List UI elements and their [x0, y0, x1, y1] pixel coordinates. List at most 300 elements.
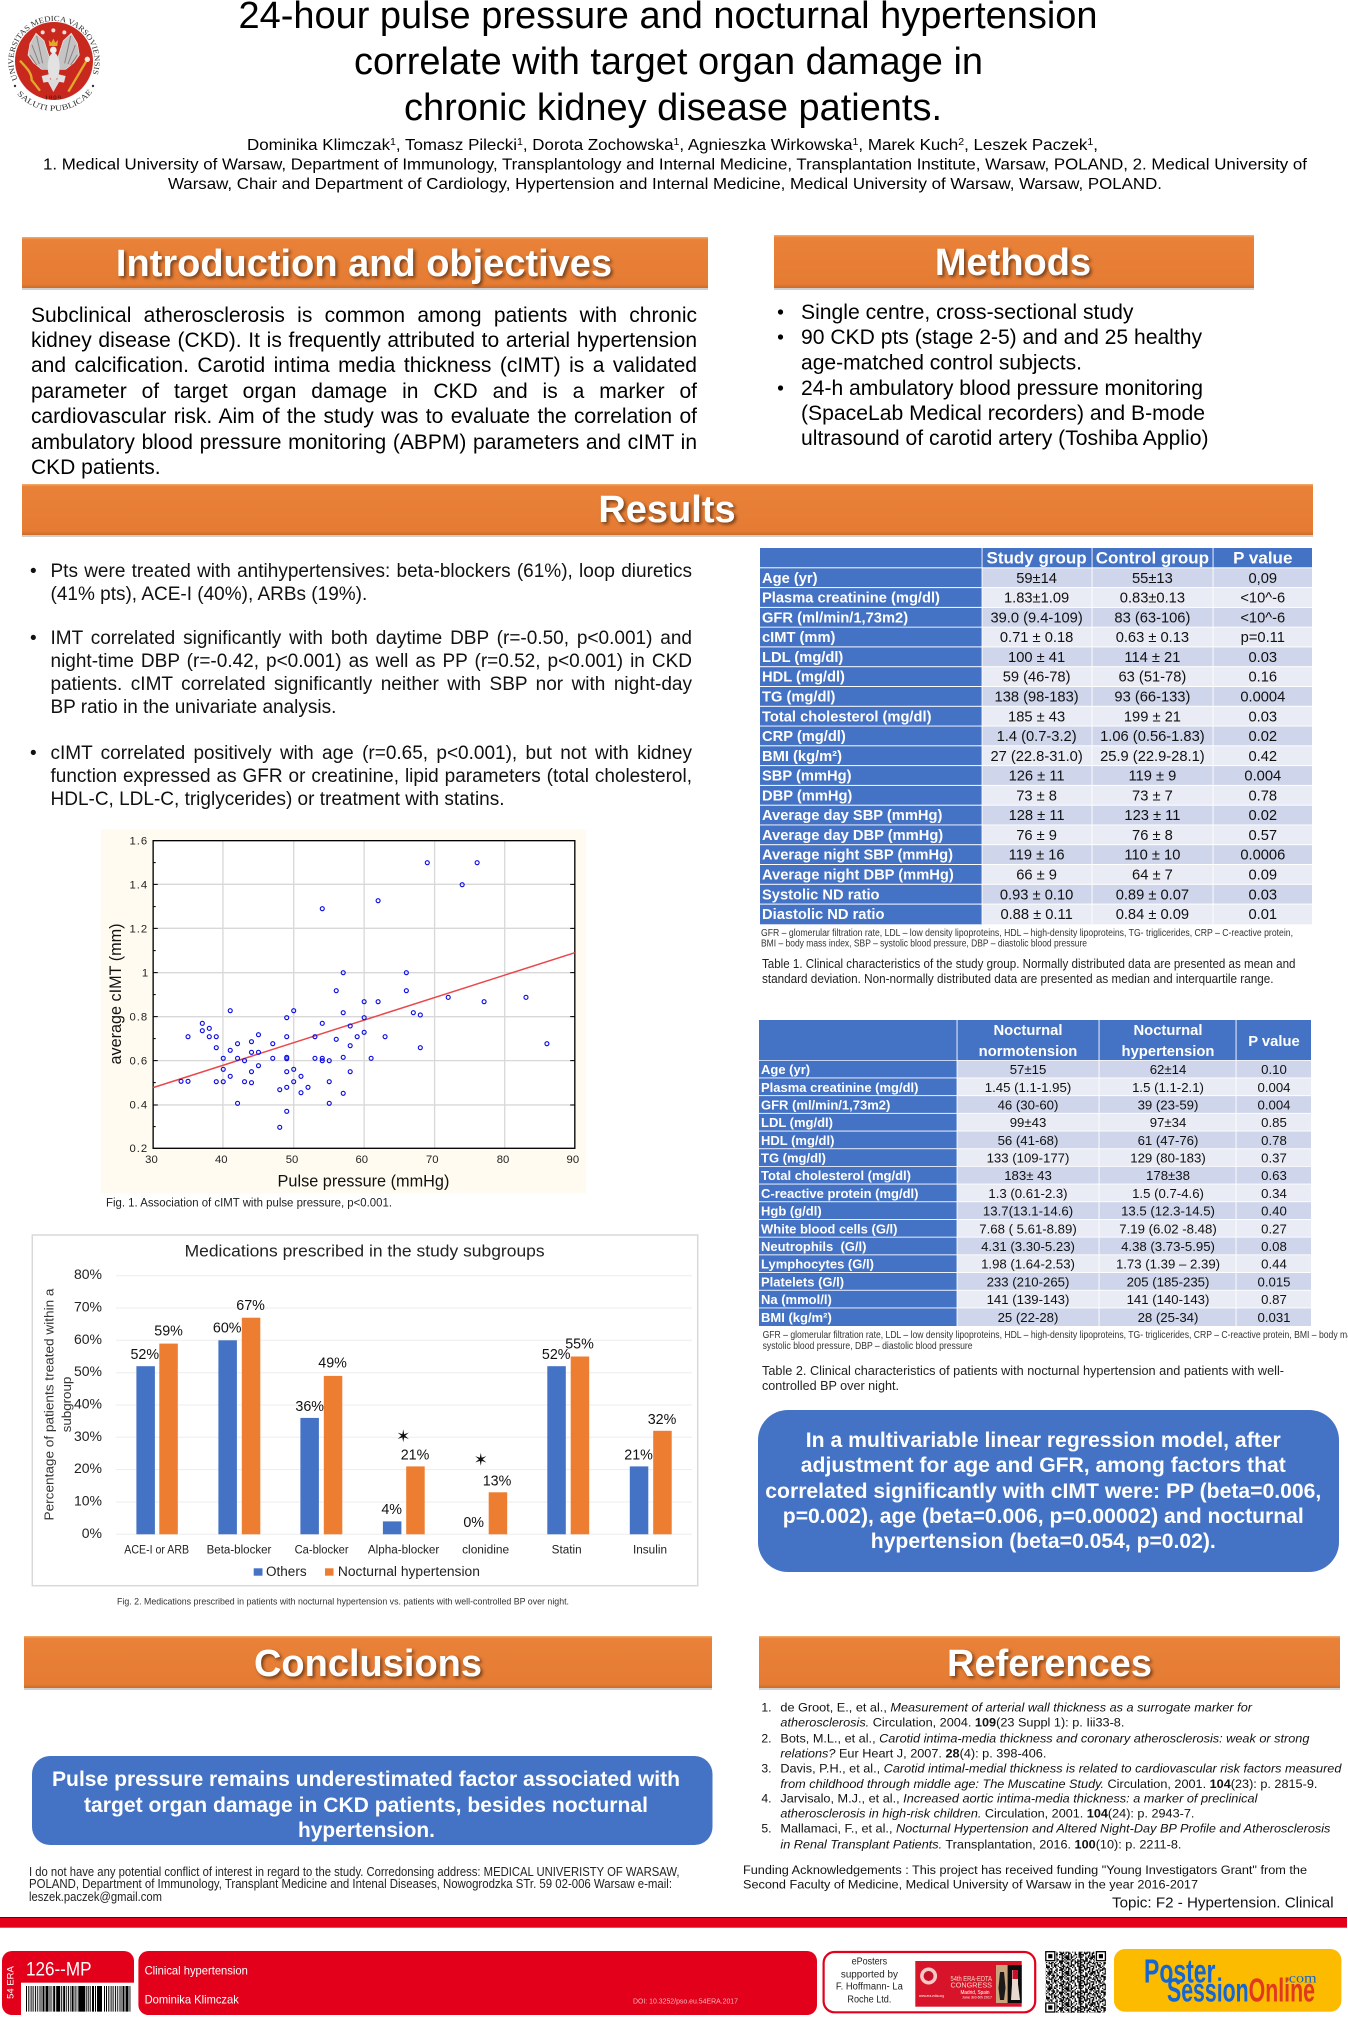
- congress banner: www.era-edta.org: [919, 1994, 944, 1998]
- row: DBP: 73 ± 7: [1132, 788, 1173, 804]
- row: Average night SBP: 0.0006: [1240, 848, 1285, 864]
- row: Platelets: [759, 1273, 1311, 1290]
- heading: Introduction and objectives: [22, 237, 708, 290]
- table 2 header row: hypertension: [1122, 1044, 1214, 1060]
- y axis labels: 70%: [74, 1298, 102, 1314]
- heading: References: References: [947, 1643, 1152, 1685]
- row: Total cholesterol: 185 ± 43: [1008, 709, 1065, 725]
- row: CRP: CRP (mg/dl): [762, 729, 846, 745]
- row: Lymphocytes: 1.98 (1.64-2.53): [981, 1257, 1075, 1272]
- figure 2 caption: Fig. 2. Medications prescribed in patients with nocturnal hypertension vs. patients with well-controlled BP over night.: [117, 1596, 569, 1607]
- row: GFR: 46 (30-60): [998, 1098, 1058, 1112]
- scatter axis tick labels: 50: [286, 1154, 298, 1166]
- footer red stripe: [0, 1917, 1347, 1928]
- row: Diastolic ND ratio: [760, 905, 1312, 924]
- row: Age: 0.10: [1261, 1062, 1287, 1077]
- bars: others: [136, 1340, 648, 1534]
- row: Age: [760, 568, 1312, 587]
- reference list: Mallamaci, F., et al., Nocturnal Hypertension and Altered Night-Day BP Profile and Atherosclerosis: [780, 1822, 1330, 1836]
- significance stars: ✶: [396, 1427, 410, 1447]
- row: SBP: SBP (mmHg): [762, 769, 852, 785]
- scatter axis tick labels: [129, 835, 579, 1166]
- bar value labels: 21%: [624, 1447, 653, 1463]
- results bullet: antihypertensive treatment: Pts were treated with antihypertensives: beta-blockers (61%), loop diuretics: [50, 561, 692, 582]
- row: C-reactive protein: C-reactive protein (mg/dl): [761, 1186, 918, 1201]
- bar value labels: 0%: [463, 1515, 484, 1531]
- congress banner: Madrid, Spain: [960, 1990, 990, 1996]
- results bullet: antihypertensive treatment: •: [30, 561, 37, 582]
- row: BMI: [760, 746, 1312, 765]
- heading: Methods: Methods: [935, 242, 1091, 284]
- row: LDL: [760, 647, 1312, 666]
- callout: multivariable regression: hypertension (beta=0.054, p=0.02).: [871, 1529, 1216, 1553]
- row: Plasma creatinine: 1.45 (1.1-1.95): [985, 1080, 1071, 1095]
- row: Average night DBP: 0.09: [1249, 868, 1277, 884]
- row: HDL: 63 (51-78): [1119, 670, 1186, 686]
- scatter axis tick labels: 60: [356, 1154, 368, 1166]
- row: Total cholesterol: Total cholesterol (mg/dl): [761, 1168, 911, 1183]
- results bullet: cIMT and age: [30, 743, 692, 810]
- row: Systolic ND ratio: 0.03: [1249, 887, 1277, 903]
- row: Average night DBP: 66 ± 9: [1016, 868, 1057, 884]
- row: Age: [759, 1061, 1311, 1078]
- bar value labels: 67%: [236, 1298, 265, 1314]
- footer banner: session and author: DOI: 10.3252/pso.eu.54ERA.2017: [633, 1997, 738, 2006]
- scatter axis tick labels: 1.6: [129, 835, 148, 847]
- bar value labels: 49%: [318, 1356, 347, 1372]
- row: cIMT: cIMT (mm): [762, 630, 836, 646]
- row: Plasma creatinine: [760, 588, 1312, 607]
- data points: [179, 861, 549, 1129]
- row: HDL: HDL (mg/dl): [761, 1133, 834, 1148]
- row: HDL: HDL (mg/dl): [762, 670, 845, 686]
- table 1: clinical characteristics of the study group: [760, 548, 1312, 924]
- row: LDL: [759, 1114, 1311, 1131]
- row: BMI: BMI (kg/m²): [761, 1310, 832, 1325]
- bars: nocturnal hypertension: [159, 1318, 672, 1534]
- authors and affiliations: Warsaw, Chair and Department of Cardiology, Hypertension and Internal Medicine, Medical University of Warsaw, Warsaw, POLAND.: [168, 176, 1162, 193]
- row: GFR: GFR (ml/min/1,73m2): [761, 1098, 890, 1112]
- row: Average day SBP: Average day SBP (mmHg): [762, 808, 942, 824]
- logo: Medical University of Warsaw seal: 1809: [45, 94, 62, 101]
- row: Average night DBP: 64 ± 7: [1132, 868, 1173, 884]
- bar value labels: 59%: [154, 1324, 183, 1340]
- logo: Medical University of Warsaw seal: SALUTI PUBLICAE: [18, 89, 92, 111]
- row: Age: Age (yr): [762, 571, 818, 587]
- row: TG: [759, 1149, 1311, 1166]
- row: GFR: GFR (ml/min/1,73m2): [762, 610, 908, 626]
- logo: Medical University of Warsaw seal: UNIVERSITAS MEDICA VARSOVIENSIS: [8, 16, 100, 82]
- row: Total cholesterol: Total cholesterol (mg/dl): [762, 709, 932, 725]
- table 2 caption: Table 2. Clinical characteristics of patients with nocturnal hypertension and patients with well-: [762, 1364, 1284, 1378]
- row: Lymphocytes: Lymphocytes (G/l): [761, 1257, 874, 1272]
- funding acknowledgements: Second Faculty of Medicine, Medical University of Warsaw in the year 2016-2017: [743, 1878, 1198, 1892]
- authors and affiliations: [43, 137, 1308, 193]
- row: TG: 129 (80-183): [1130, 1151, 1206, 1166]
- row: Neutrophils: 4.38 (3.73-5.95): [1121, 1239, 1215, 1254]
- table 2 abbreviations footnote: systolic blood pressure, DBP – diastolic blood pressure: [763, 1341, 973, 1352]
- row: Age: Age (yr): [761, 1062, 810, 1077]
- bar chart: medications prescribed: [32, 1235, 698, 1586]
- scatter axis tick labels: 0.6: [129, 1055, 148, 1067]
- row: Average night SBP: Average night SBP (mmHg): [762, 848, 953, 864]
- row: Na: [759, 1291, 1311, 1308]
- row: Total cholesterol: [760, 707, 1312, 726]
- bar value labels: 52%: [130, 1347, 159, 1363]
- row: Neutrophils: 0.08: [1261, 1239, 1287, 1254]
- barcode: [26, 1986, 130, 2012]
- row: Plasma creatinine: 0.83±0.13: [1120, 591, 1185, 607]
- y axis title: subgroup: [59, 1377, 74, 1432]
- x axis labels: Alpha-blocker: [368, 1544, 439, 1556]
- logo: PosterSessionOnline: .com: [1285, 1972, 1317, 1987]
- authors and affiliations: , Leszek Paczek: [964, 137, 1088, 154]
- scatter axis tick labels: 0.4: [129, 1100, 148, 1112]
- title: [238, 0, 1098, 129]
- row: SBP: [760, 766, 1312, 785]
- y axis title: Percentage of patients treated within a: [42, 1288, 56, 1520]
- sponsor box: Roche Ltd.: [847, 1994, 891, 2005]
- row: Plasma creatinine: 0.004: [1257, 1080, 1291, 1095]
- QR code: [1045, 1951, 1106, 2013]
- row: Age: 55±13: [1132, 571, 1173, 587]
- table 2 caption: controlled BP over night.: [762, 1379, 899, 1393]
- heading: Results: [22, 484, 1313, 537]
- row: DBP: 0.78: [1249, 788, 1277, 804]
- row: Average day SBP: 0.02: [1249, 808, 1277, 824]
- callout: multivariable regression: p=0.002), age (beta=0.006, p=0.00002) and nocturnal: [783, 1504, 1304, 1528]
- row: Systolic ND ratio: Systolic ND ratio: [762, 887, 880, 903]
- row: LDL: LDL (mg/dl): [762, 650, 843, 666]
- row: Average day SBP: 123 ± 11: [1124, 808, 1180, 824]
- reference list: atherosclerosis. Circulation, 2004. 109(23 Suppl 1): p. Iii33-8.: [780, 1716, 1124, 1730]
- callout: multivariable regression: In a multivariable linear regression model, after: [806, 1428, 1281, 1452]
- table 2 header row: Nocturnal: [1133, 1023, 1203, 1039]
- scatter axis tick labels: 1.2: [129, 923, 148, 935]
- row: Total cholesterol: 0.63: [1261, 1168, 1287, 1183]
- sponsor box: supported by: [841, 1969, 898, 1980]
- row: Total cholesterol: 183± 43: [1004, 1168, 1052, 1183]
- authors and affiliations: 1: [1087, 137, 1094, 148]
- row: HDL: 56 (41-68): [998, 1133, 1058, 1148]
- row: Systolic ND ratio: 0.89 ± 0.07: [1116, 887, 1189, 903]
- conflict of interest statement: I do not have any potential conflict of interest in regard to the study. Corredonsing address: MEDICAL UNIVERISTY OF WARSAW,: [29, 1865, 680, 1879]
- results bullet: cIMT and age: •: [30, 743, 37, 764]
- row: Total cholesterol: 199 ± 21: [1124, 709, 1181, 725]
- row: DBP: DBP (mmHg): [762, 788, 852, 804]
- methods bullet list: Single centre, cross-sectional study: [801, 301, 1134, 324]
- heading: Introduction and objectives: Introduction and objectives: [116, 243, 612, 285]
- chart title: Medications prescribed in the study subgroups: [185, 1242, 545, 1261]
- heading: Results: Results: [598, 489, 736, 531]
- row: White blood cells: 7.68 ( 5.61-8.89): [979, 1221, 1077, 1236]
- x axis labels: clonidine: [462, 1544, 509, 1556]
- footer tag: poster ID and barcode: 54 ERA: [6, 1965, 16, 1999]
- significance stars: [396, 1427, 488, 1470]
- row: Total cholesterol: [759, 1167, 1311, 1184]
- table 2 header row: Nocturnal: [993, 1023, 1063, 1039]
- row: Lymphocytes: 1.73 (1.39 – 2.39): [1116, 1257, 1220, 1272]
- row: Plasma creatinine: 1.83±1.09: [1004, 591, 1069, 607]
- sponsor box: F. Hoffmann- La: [836, 1982, 903, 1993]
- row: White blood cells: 7.19 (6.02 -8.48): [1119, 1221, 1217, 1236]
- table 1 header row: Control group: [1096, 548, 1209, 567]
- table 2: nocturnal hypertension vs normotension: [759, 1020, 1311, 1326]
- congress banner: June 3rd-6th 2017: [962, 1994, 993, 2000]
- x axis labels: [124, 1544, 667, 1556]
- row: cIMT: [760, 628, 1312, 646]
- row: Age: 0,09: [1249, 571, 1277, 587]
- row: Neutrophils: Neutrophils (G/l): [761, 1239, 866, 1254]
- row: SBP: 119 ± 9: [1128, 769, 1176, 785]
- scatter axis tick labels: 0.2: [129, 1143, 148, 1155]
- row: Hgb: 13.7(13.1-14.6): [983, 1204, 1073, 1219]
- reference list: 5.: [761, 1822, 772, 1836]
- scatter x axis title: Pulse pressure (mmHg): [278, 1173, 449, 1191]
- row: Na: Na (mmol/l): [761, 1292, 832, 1307]
- row: HDL: 61 (47-76): [1138, 1133, 1198, 1148]
- row: CRP: 1.06 (0.56-1.83): [1100, 729, 1205, 745]
- row: BMI: 25.9 (22.9-28.1): [1100, 749, 1205, 765]
- methods bullet list: (SpaceLab Medical recorders) and B-mode: [801, 402, 1205, 425]
- row: GFR: 0.004: [1257, 1098, 1291, 1112]
- row: TG: TG (mg/dl): [762, 690, 836, 706]
- results bullet: IMT correlations: night-time DBP (r=-0.42, p<0.001) as well as PP (r=0.52, p<0.001) in CKD: [50, 651, 692, 672]
- row: C-reactive protein: [759, 1184, 1311, 1201]
- y axis labels: 30%: [74, 1428, 102, 1444]
- conflict of interest statement: [29, 1865, 680, 1904]
- row: White blood cells: [759, 1220, 1311, 1237]
- row: Lymphocytes: [759, 1255, 1311, 1272]
- row: cIMT: 0.71 ± 0.18: [1000, 630, 1073, 646]
- row: LDL: 114 ± 21: [1124, 650, 1180, 666]
- row: Platelets: 205 (185-235): [1127, 1274, 1209, 1289]
- row: LDL: 100 ± 41: [1008, 650, 1065, 666]
- authors and affiliations: 1: [517, 137, 523, 148]
- topic label: Topic: F2 - Hypertension. Clinical: [1112, 1896, 1334, 1912]
- bar value labels: [130, 1298, 677, 1531]
- row: LDL: 99±43: [1010, 1115, 1046, 1130]
- logo: Medical University of Warsaw seal: [8, 16, 100, 111]
- row: Platelets: 233 (210-265): [987, 1274, 1069, 1289]
- row: Na: 141 (139-143): [987, 1292, 1069, 1307]
- row: Systolic ND ratio: 0.93 ± 0.10: [1000, 887, 1073, 903]
- authors and affiliations: , Marek Kuch: [858, 137, 958, 154]
- y axis labels: 80%: [74, 1266, 102, 1282]
- results bullet: IMT correlations: IMT correlated significantly with both daytime DBP (r=-0.50, p<0.001) and: [50, 628, 692, 649]
- row: cIMT: p=0.11: [1241, 630, 1285, 646]
- logo: PosterSessionOnline: Poster: [1144, 1953, 1216, 1990]
- row: LDL: 0.85: [1261, 1115, 1287, 1130]
- methods bullet list: age-matched control subjects.: [801, 352, 1082, 374]
- scatter axis tick labels: 1: [142, 967, 148, 979]
- y axis title: [42, 1288, 74, 1520]
- row: Average day DBP: 0.57: [1249, 828, 1277, 844]
- congress banner: [915, 1961, 1022, 2007]
- row: Diastolic ND ratio: 0.84 ± 0.09: [1116, 907, 1189, 923]
- title: chronic kidney disease patients.: [404, 87, 942, 129]
- row: GFR: 83 (63-106): [1114, 610, 1190, 626]
- row: Na: 141 (140-143): [1127, 1292, 1209, 1307]
- reference list: 3.: [761, 1762, 772, 1776]
- row: Total cholesterol: 178±38: [1146, 1168, 1190, 1183]
- bar value labels: 32%: [648, 1412, 677, 1428]
- row: White blood cells: White blood cells (G/l): [761, 1221, 898, 1236]
- table 1 abbreviations footnote: [761, 928, 1293, 950]
- reference list: from childhood through middle age: The Muscatine Study. Circulation, 2001. 104(23): p. 2815-9.: [780, 1777, 1317, 1791]
- bar value labels: 21%: [401, 1447, 430, 1463]
- table 1 header row: P value: [1233, 548, 1292, 567]
- significance stars: ✶: [474, 1450, 488, 1470]
- row: Average night SBP: 119 ± 16: [1009, 848, 1065, 864]
- row: HDL: [760, 667, 1312, 686]
- authors and affiliations: 1: [390, 137, 396, 148]
- scatter plot: cIMT vs pulse pressure: [101, 829, 586, 1193]
- text block: introduction and objectives: CKD patients.: [31, 456, 161, 479]
- callout: conclusion statement: [32, 1756, 712, 1845]
- x axis labels: Statin: [552, 1544, 582, 1556]
- authors and affiliations: 1: [673, 137, 680, 148]
- footer banner: session and author: [138, 1951, 817, 2015]
- callout: multivariable regression: correlated significantly with cIMT were: PP (beta=0.006,: [765, 1479, 1321, 1503]
- table 1 caption: standard deviation. Non-normally distributed data are presented as median and interquartile range.: [762, 972, 1274, 986]
- y axis labels: 60%: [74, 1331, 102, 1347]
- callout: conclusion statement: hypertension.: [298, 1818, 435, 1842]
- row: DBP: 73 ± 8: [1016, 788, 1057, 804]
- x axis labels: Beta-blocker: [207, 1544, 272, 1556]
- row: SBP: 0.004: [1244, 769, 1281, 785]
- reference list: [761, 1701, 1343, 1851]
- bar value labels: 52%: [542, 1347, 571, 1363]
- row: LDL: 97±34: [1150, 1115, 1186, 1130]
- table 2 header row: P value: [1248, 1034, 1300, 1050]
- table 1 header row: [987, 548, 1292, 567]
- row: Neutrophils: 4.31 (3.30-5.23): [981, 1239, 1075, 1254]
- row: Age: 62±14: [1150, 1062, 1186, 1077]
- methods bullet list: 90 CKD pts (stage 2-5) and and 25 healthy: [801, 326, 1202, 349]
- row: Average day DBP: Average day DBP (mmHg): [762, 828, 943, 844]
- authors and affiliations: , Tomasz Pilecki: [396, 137, 517, 154]
- row: Platelets: 0.015: [1257, 1274, 1291, 1289]
- callout: multivariable regression: adjustment for age and GFR, among factors that: [801, 1453, 1286, 1477]
- y axis labels: 50%: [74, 1363, 102, 1379]
- x axis labels: Ca-blocker: [295, 1544, 349, 1556]
- heading: Methods: [774, 235, 1254, 290]
- reference list: 4.: [761, 1792, 772, 1806]
- row: HDL: 0.78: [1261, 1133, 1287, 1148]
- results bullet: IMT correlations: •: [30, 628, 37, 649]
- text block: introduction and objectives: kidney disease (CKD). It is frequently attributed to arterial hypertension: [31, 329, 697, 352]
- congress banner: CONGRESS: [950, 1982, 992, 1989]
- x axis labels: Insulin: [633, 1544, 667, 1556]
- row: Diastolic ND ratio: Diastolic ND ratio: [762, 907, 884, 923]
- reference list: Bots, M.L., et al., Carotid intima-media thickness and coronary atherosclerosis: weak or strong: [780, 1731, 1310, 1745]
- row: Neutrophils: [759, 1238, 1311, 1254]
- row: BMI: 27 (22.8-31.0): [990, 749, 1083, 765]
- row: Average day DBP: [760, 825, 1312, 844]
- authors and affiliations: 2: [958, 137, 965, 148]
- row: DBP: [760, 786, 1312, 805]
- row: Diastolic ND ratio: 0.01: [1249, 907, 1277, 923]
- text block: introduction and objectives: [31, 304, 697, 479]
- results bullet: cIMT and age: function expressed as GFR or creatinine, lipid parameters (total cholesterol,: [50, 766, 692, 787]
- y axis labels: 10%: [74, 1492, 102, 1508]
- text block: introduction and objectives: ambulatory blood pressure monitoring (ABPM) parameters and cIMT in: [31, 431, 697, 454]
- row: Age: 59±14: [1016, 571, 1057, 587]
- row: CRP: [760, 726, 1312, 745]
- row: SBP: 126 ± 11: [1009, 769, 1065, 785]
- row: C-reactive protein: 0.34: [1261, 1186, 1287, 1201]
- row: Total cholesterol: 0.03: [1249, 709, 1277, 725]
- table 2 caption: [762, 1364, 1284, 1393]
- row: LDL: 0.03: [1249, 650, 1277, 666]
- scatter axis tick labels: 40: [215, 1154, 228, 1166]
- x axis labels: ACE-I or ARB: [124, 1544, 189, 1556]
- row: BMI: 28 (25-34): [1138, 1310, 1198, 1325]
- chart legend: Nocturnal hypertension: [338, 1564, 480, 1579]
- row: Hgb: 13.5 (12.3-14.5): [1121, 1204, 1215, 1219]
- row: Plasma creatinine: 1.5 (1.1-2.1): [1132, 1080, 1204, 1095]
- logo: PosterSessionOnline: [1114, 1949, 1341, 2012]
- congress banner: 54th ERA-EDTA: [950, 1976, 992, 1983]
- row: LDL: LDL (mg/dl): [761, 1115, 833, 1130]
- row: HDL: 59 (46-78): [1003, 670, 1070, 686]
- chart legend: [254, 1564, 480, 1579]
- footer banner: session and author: Clinical hypertension: [145, 1964, 248, 1978]
- reference list: 2.: [761, 1731, 772, 1745]
- table 1 abbreviations footnote: BMI – body mass index, SBP – systolic blood pressure, DBP – diastolic blood pressure: [761, 939, 1087, 950]
- row: BMI: BMI (kg/m²): [762, 749, 842, 765]
- title: correlate with target organ damage in: [354, 41, 983, 83]
- row: Average night SBP: [760, 845, 1312, 864]
- row: Age: 57±15: [1010, 1062, 1046, 1077]
- table 1 header row: Study group: [987, 548, 1087, 567]
- row: Platelets: Platelets (G/l): [761, 1274, 844, 1289]
- table 2 header row: [979, 1023, 1300, 1060]
- row: TG: 0.37: [1261, 1151, 1287, 1166]
- authors and affiliations: Dominika Klimczak: [247, 137, 382, 154]
- row: Plasma creatinine: Plasma creatinine (mg/dl): [761, 1080, 918, 1095]
- row: White blood cells: 0.27: [1261, 1221, 1287, 1236]
- reference list: Jarvisalo, M.J., et al., Increased aortic intima-media thickness: a marker of preclinical: [780, 1792, 1258, 1806]
- bar value labels: 60%: [213, 1321, 242, 1337]
- authors and affiliations: , Agnieszka Wirkowska: [679, 137, 853, 154]
- results bullet: cIMT and age: HDL-C, LDL-C, triglycerides) or treatment with statins.: [50, 789, 505, 810]
- footer banner: session and author: Dominika Klimczak: [145, 1992, 240, 2006]
- row: BMI: [759, 1308, 1311, 1326]
- bar value labels: 13%: [483, 1473, 512, 1489]
- table 2 abbreviations footnote: [763, 1330, 1348, 1352]
- callout: multivariable regression: [758, 1410, 1339, 1572]
- y axis labels: 0%: [82, 1525, 102, 1541]
- reference list: relations? Eur Heart J, 2007. 28(4): p. 398-406.: [780, 1746, 1046, 1760]
- reference list: atherosclerosis in high-risk children. Circulation, 2001. 104(24): p. 2943-7.: [780, 1807, 1194, 1821]
- results bullet: IMT correlations: [30, 628, 692, 718]
- text block: introduction and objectives: parameter of target organ damage in CKD and is a marker of: [31, 380, 697, 403]
- row: C-reactive protein: 1.3 (0.61-2.3): [988, 1186, 1068, 1201]
- reference list: Davis, P.H., et al., Carotid intimal-medial thickness is related to cardiovascular risk factors measured: [780, 1762, 1343, 1776]
- footer tag: poster ID and barcode: [2, 1951, 134, 2015]
- bar value labels: 4%: [381, 1502, 402, 1518]
- row: GFR: [759, 1096, 1311, 1113]
- row: BMI: 0.031: [1257, 1310, 1291, 1325]
- authors and affiliations: 1: [853, 137, 859, 148]
- text block: introduction and objectives: cardiovascular risk. Aim of the study was to evaluate the correlation of: [31, 405, 697, 428]
- results bullet: IMT correlations: BP ratio in the univariate analysis.: [50, 697, 336, 718]
- row: cIMT: 0.63 ± 0.13: [1116, 630, 1189, 646]
- callout: conclusion statement: Pulse pressure remains underestimated factor associated with: [52, 1767, 680, 1791]
- row: Na: 0.87: [1261, 1292, 1287, 1307]
